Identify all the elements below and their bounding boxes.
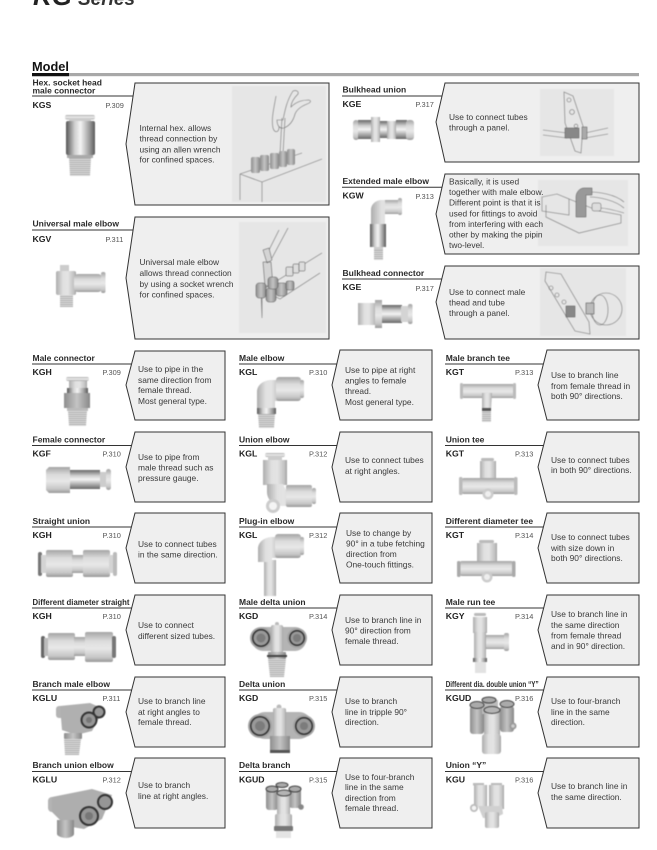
description: Use to connect tubes xyxy=(449,112,528,122)
callout box xyxy=(332,758,432,828)
model code: KGH xyxy=(32,367,52,377)
description: male thread such as xyxy=(138,462,213,472)
description: female thread. xyxy=(345,803,399,813)
page reference: P.316 xyxy=(515,694,533,703)
heading: Extended male elbow xyxy=(342,176,429,186)
description: One-touch fittings. xyxy=(346,560,414,570)
description: Use to pipe in the xyxy=(138,364,204,374)
page reference: P.314 xyxy=(515,612,533,621)
model code: KGS xyxy=(32,100,52,110)
model code: KGLU xyxy=(32,693,57,703)
description: Use to branch line in xyxy=(345,615,422,625)
callout box xyxy=(126,677,225,747)
model code: KGD xyxy=(239,693,258,703)
page reference: P.314 xyxy=(309,612,327,621)
description: thead and tube xyxy=(449,298,505,308)
page reference: P.309 xyxy=(106,101,124,110)
description: and in 90° direction. xyxy=(551,641,625,651)
fitting photo xyxy=(38,550,117,577)
page reference: P.310 xyxy=(102,531,121,540)
page reference: P.312 xyxy=(102,776,121,784)
description: pressure gauge. xyxy=(138,473,199,483)
model code: KGW xyxy=(342,190,365,200)
description: Use to change by xyxy=(346,528,412,538)
heading: Male delta union xyxy=(239,597,306,607)
heading: Hex. socket head xyxy=(32,78,102,88)
panel: Male branch tee xyxy=(445,350,639,422)
page reference: P.315 xyxy=(309,694,327,703)
panel: Union elbow xyxy=(239,432,432,513)
panel: Plug-in elbow xyxy=(239,513,432,596)
model code: KGF xyxy=(32,448,51,458)
description: Use to branch xyxy=(138,780,190,790)
heading: Straight union xyxy=(32,516,90,526)
section heading: Model: Model xyxy=(32,59,69,74)
description: 90° in a tube fetching xyxy=(346,538,425,548)
callout box xyxy=(126,595,225,665)
description: from female thread in xyxy=(551,381,630,391)
callout box xyxy=(332,350,432,420)
heading: Union elbow xyxy=(239,434,290,444)
panel: Union tee xyxy=(445,432,639,502)
description: together with male elbow. xyxy=(449,187,544,197)
fitting photo xyxy=(470,783,504,828)
page reference: P.310 xyxy=(309,368,327,377)
title xyxy=(33,0,135,11)
description: for confined spaces. xyxy=(140,290,214,300)
panel: Union Y xyxy=(445,758,639,828)
model code: KGU xyxy=(446,774,465,784)
description: Use to branch line in xyxy=(551,609,628,619)
illustration: through-panel union xyxy=(540,89,614,156)
panel: Branch male elbow xyxy=(32,677,225,755)
model code: KGD xyxy=(239,611,258,621)
panel: Hex. socket head male connector xyxy=(32,78,329,205)
fitting photo xyxy=(358,300,412,328)
callout box xyxy=(126,217,329,339)
description: at right angles to xyxy=(138,707,200,717)
fitting photo xyxy=(473,613,509,673)
page reference: P.310 xyxy=(102,612,121,621)
panel: Different diameter tee xyxy=(445,513,639,583)
description: direction from xyxy=(346,549,397,559)
description: female thread. xyxy=(138,717,192,727)
description: same direction from xyxy=(138,375,212,385)
page reference: P.315 xyxy=(309,776,327,784)
description: Use to branch line xyxy=(551,370,619,380)
heading: Universal male elbow xyxy=(32,219,119,229)
description: female thread. xyxy=(345,636,399,646)
description: from female thread xyxy=(551,630,622,640)
description: by using a socket wrench xyxy=(140,279,234,289)
description: Use to connect tubes xyxy=(551,455,630,465)
description: thread connection by xyxy=(140,134,218,144)
description: line in tripple 90° xyxy=(345,707,407,717)
description: Use to four-branch xyxy=(345,772,415,782)
panel: Branch union elbow xyxy=(32,758,225,838)
panel: Male connector xyxy=(32,351,225,426)
description: 90° direction from xyxy=(345,626,411,636)
heading: Different diameter straight xyxy=(32,597,130,607)
model code: KGLU xyxy=(32,774,57,784)
heading: Branch union elbow xyxy=(32,760,114,770)
description: Use to pipe at right xyxy=(345,365,416,375)
panel: Bulkhead union xyxy=(342,83,639,162)
description: both 90° directions. xyxy=(551,391,623,401)
model code: KGT xyxy=(446,448,465,458)
callout box xyxy=(436,266,639,339)
page reference: P.311 xyxy=(106,235,123,244)
description: through a panel. xyxy=(449,308,510,318)
fitting photo xyxy=(257,377,304,428)
description: from interfering with each xyxy=(449,219,543,229)
description: Use to connect tubes xyxy=(138,539,217,549)
callout box xyxy=(126,513,225,583)
description: both 90° directions. xyxy=(551,553,623,563)
model code: KGE xyxy=(342,99,362,109)
page reference: P.311 xyxy=(102,694,120,703)
description: Basically, it is used xyxy=(449,176,519,186)
description: Use to pipe from xyxy=(138,452,199,462)
description: Use to connect male xyxy=(449,287,526,297)
fitting photo xyxy=(56,703,106,755)
page reference: P.309 xyxy=(102,368,121,377)
description: the same direction. xyxy=(551,792,622,802)
callout box xyxy=(126,351,225,420)
description: angles to female xyxy=(345,376,407,386)
model code: KGV xyxy=(32,234,52,244)
model code: KGH xyxy=(32,611,52,621)
heading: Plug-in elbow xyxy=(239,516,295,526)
page reference: P.316 xyxy=(515,776,533,784)
callout box xyxy=(538,595,639,665)
description: allows thread connection xyxy=(140,268,232,278)
panel: Male elbow xyxy=(239,350,432,428)
heading: Union “Y” xyxy=(446,760,486,770)
description: two-level. xyxy=(449,240,484,250)
panel: Universal male elbow xyxy=(32,217,329,339)
description: with size down in xyxy=(550,543,615,553)
page reference: P.313 xyxy=(515,450,533,458)
description: used for fittings to avoid xyxy=(449,208,538,218)
description: Use to four-branch xyxy=(551,696,621,706)
fitting photo xyxy=(258,534,304,596)
callout box xyxy=(436,174,639,254)
callout box xyxy=(538,758,639,828)
model code: KGUD xyxy=(446,693,471,703)
fitting photo xyxy=(263,453,316,513)
fitting photo xyxy=(248,704,315,753)
callout box xyxy=(332,595,432,665)
panel: Different diameter straight xyxy=(32,595,225,665)
description: female thread. xyxy=(138,385,192,395)
model code: KGL xyxy=(239,530,258,540)
description: for confined spaces. xyxy=(140,155,214,165)
panel: Delta union xyxy=(239,677,432,753)
fitting photo xyxy=(459,458,518,500)
description: Most general type. xyxy=(345,397,414,407)
description: Use to branch line in xyxy=(551,781,628,791)
model code: KGUD xyxy=(239,774,265,784)
heading: Female connector xyxy=(32,434,106,444)
heading: Male elbow xyxy=(239,353,285,363)
description: Use to connect tubes xyxy=(345,455,424,465)
fitting photo xyxy=(48,789,113,838)
description: using an allen wrench xyxy=(140,144,221,154)
callout box xyxy=(126,432,225,502)
description: other by making the pipin xyxy=(449,230,543,240)
description: line in the same xyxy=(551,707,610,717)
illustration: panel with gauge xyxy=(540,268,626,336)
panel: Extended male elbow xyxy=(342,174,639,260)
description: in the same direction. xyxy=(138,550,218,560)
fitting photo xyxy=(64,377,90,426)
model code: KGT xyxy=(446,367,465,377)
fitting photo xyxy=(457,540,516,582)
description: Most general type. xyxy=(138,396,207,406)
description: direction. xyxy=(551,717,585,727)
description: thread. xyxy=(345,386,371,396)
heading: Different diameter tee xyxy=(446,516,533,526)
panel: Delta branch xyxy=(239,758,432,838)
model code: KGT xyxy=(446,530,465,540)
page reference: P.317 xyxy=(416,284,434,293)
model code: KGE xyxy=(342,282,362,292)
description: at right angles. xyxy=(345,466,400,476)
callout box xyxy=(538,350,639,420)
description: line at right angles. xyxy=(138,791,208,801)
page reference: P.312 xyxy=(309,531,327,540)
page reference: P.312 xyxy=(309,450,327,458)
description: through a panel. xyxy=(449,122,510,132)
heading: Bulkhead connector xyxy=(342,268,425,278)
description: the same direction xyxy=(551,620,620,630)
fitting photo xyxy=(65,115,95,176)
fitting photo xyxy=(370,198,402,260)
fitting photo xyxy=(353,117,414,142)
heading: Branch male elbow xyxy=(32,679,110,689)
heading: Union tee xyxy=(446,434,485,444)
heading: Male run tee xyxy=(446,597,496,607)
description: Universal male elbow xyxy=(140,257,220,267)
callout box xyxy=(332,513,432,583)
callout box xyxy=(538,513,639,583)
fitting photo xyxy=(266,782,304,838)
panel: Male delta union xyxy=(239,595,432,677)
model code: KGY xyxy=(446,611,465,621)
description: direction from xyxy=(345,793,396,803)
page reference: P.317 xyxy=(416,100,434,109)
fitting photo xyxy=(470,697,516,754)
description: in both 90° directions. xyxy=(551,465,632,475)
page reference: P.313 xyxy=(515,368,533,377)
fitting photo xyxy=(56,265,106,307)
callout box xyxy=(436,83,639,162)
model code: KGH xyxy=(32,530,52,540)
illustration: socket wrench xyxy=(239,222,326,333)
fitting photo xyxy=(460,383,516,422)
description: direction. xyxy=(345,717,379,727)
fitting photo xyxy=(46,467,111,493)
callout box xyxy=(332,677,432,747)
heading: Bulkhead union xyxy=(342,85,406,95)
description: Different point is that it is xyxy=(449,198,541,208)
heading: Different dia. double union “Y” xyxy=(446,679,539,689)
callout box xyxy=(126,83,329,205)
section heading: Model xyxy=(32,59,639,76)
page reference: P.313 xyxy=(416,192,434,201)
heading: Male connector xyxy=(32,353,96,363)
description: Use to branch xyxy=(345,696,397,706)
panel: Straight union xyxy=(32,513,225,583)
callout box xyxy=(126,758,225,828)
description: Internal hex. allows xyxy=(140,123,211,133)
illustration: manifold with elbows xyxy=(538,180,628,246)
fitting photo xyxy=(250,622,307,677)
panel: Female connector xyxy=(32,432,225,502)
panel: Different dia. double union Y xyxy=(445,677,639,754)
panel: Bulkhead connector xyxy=(342,266,639,339)
callout box xyxy=(538,432,639,502)
page reference: P.310 xyxy=(102,450,121,458)
callout box xyxy=(332,432,432,502)
heading: Delta union xyxy=(239,679,285,689)
heading: male connector xyxy=(32,86,96,96)
description: Use to branch line xyxy=(138,696,206,706)
fitting photo xyxy=(41,632,116,662)
illustration: hand with allen wrench xyxy=(232,86,326,202)
heading: Male branch tee xyxy=(446,353,510,363)
model code: KGL xyxy=(239,367,258,377)
description: line in the same xyxy=(345,782,404,792)
description: different sized tubes. xyxy=(138,631,215,641)
panel: Male run tee xyxy=(445,595,639,673)
page reference: P.314 xyxy=(515,531,533,540)
callout box xyxy=(538,677,639,747)
description: Use to connect tubes xyxy=(551,532,630,542)
model code: KGL xyxy=(239,448,258,458)
description: Use to connect xyxy=(138,620,195,630)
heading: Delta branch xyxy=(239,760,290,770)
